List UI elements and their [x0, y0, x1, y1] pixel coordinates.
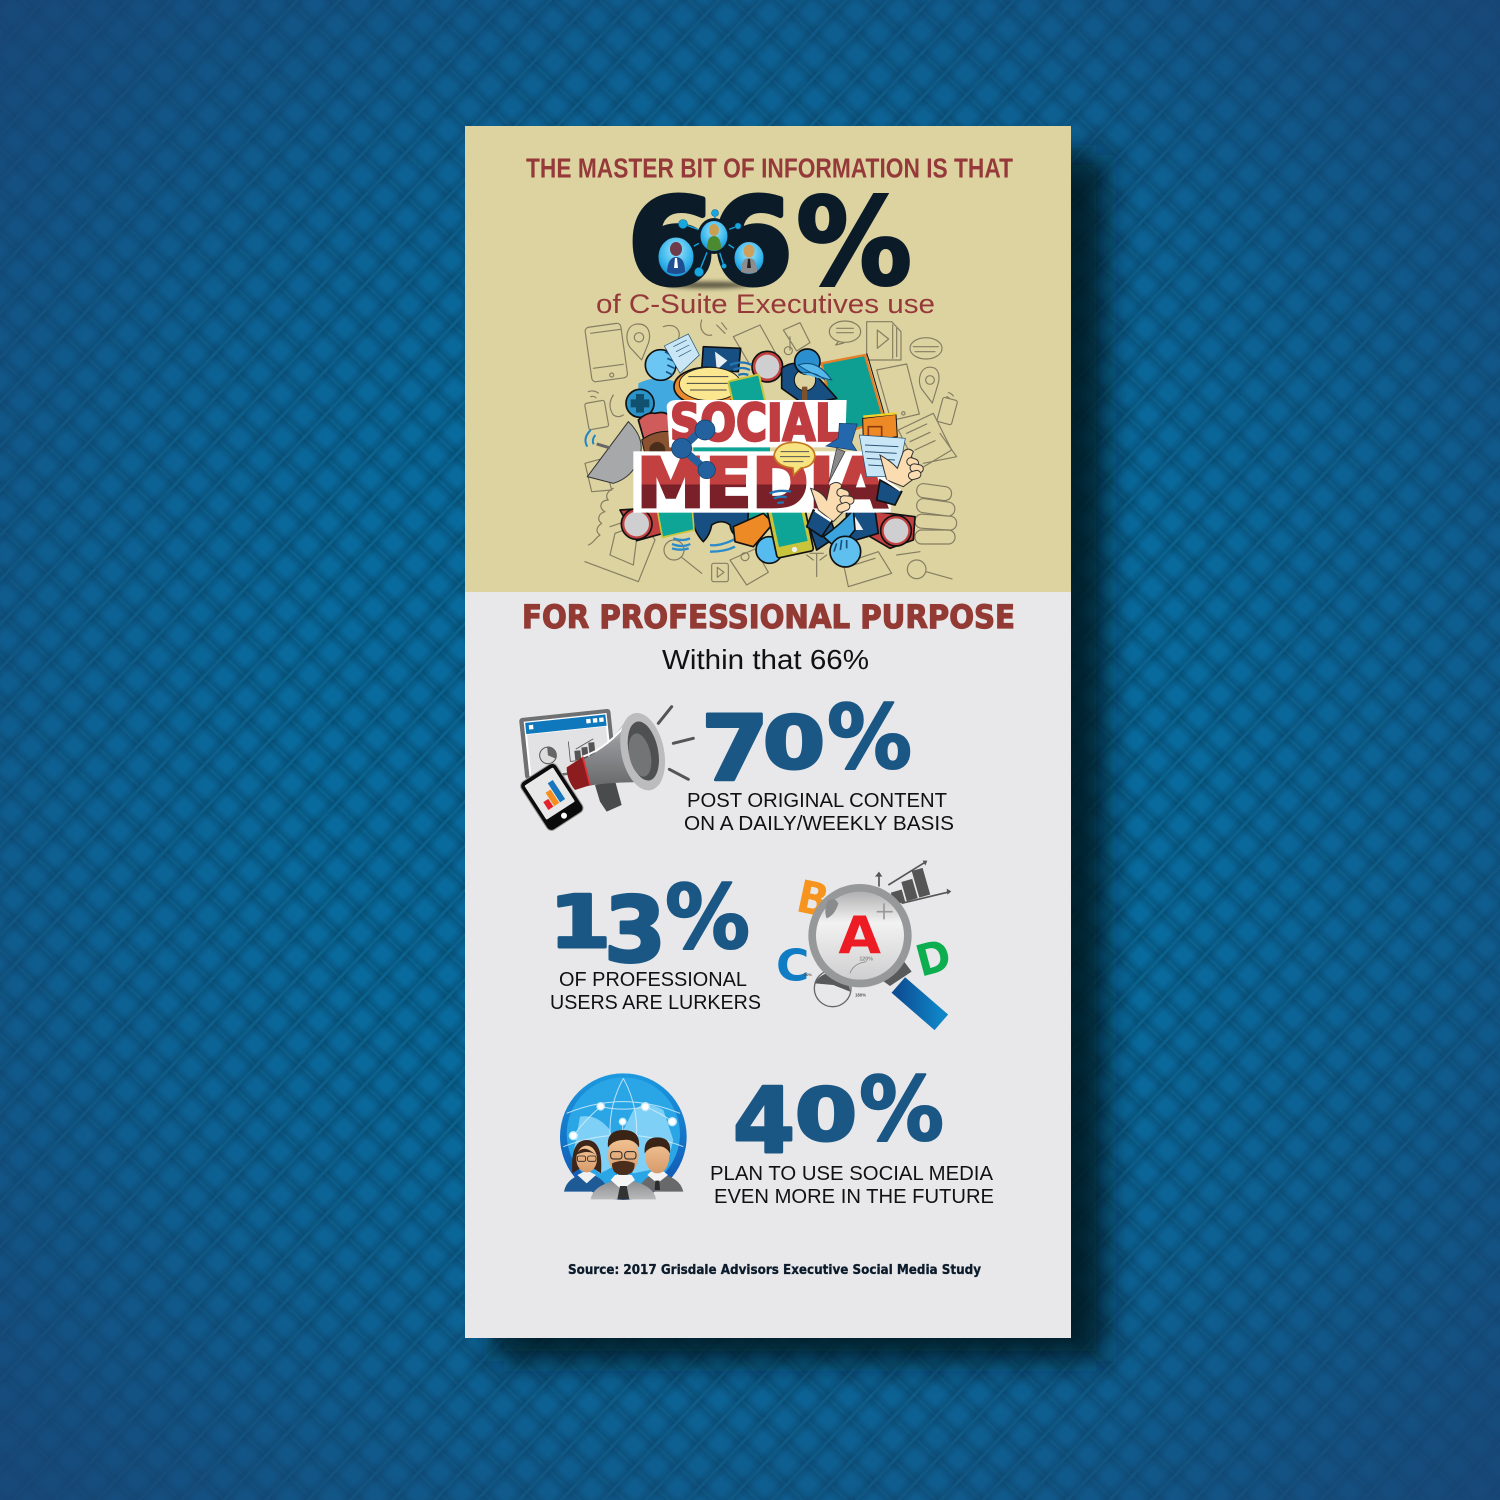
- document: [664, 334, 699, 373]
- panel: tan header: [465, 126, 1071, 592]
- molecule connector: [672, 420, 715, 479]
- value: 0: [795, 1073, 857, 1157]
- speech bubble: [674, 367, 741, 410]
- caption: [710, 1163, 994, 1208]
- caption: [550, 969, 761, 1014]
- icon: magnifier with letters: D: [911, 930, 957, 987]
- icon: globe and people: [560, 1073, 687, 1200]
- value: %: [827, 686, 912, 789]
- caption: OF PROFESSIONAL: [559, 969, 747, 991]
- caption: [684, 790, 954, 835]
- caption: POST ORIGINAL CONTENT: [687, 790, 947, 812]
- stat: 70%: [519, 686, 954, 835]
- heading: professional purpose: FOR PROFESSIONAL PURPOSE: [522, 598, 1015, 636]
- caption: ON A DAILY/WEEKLY BASIS: [684, 813, 954, 835]
- heading: master bit: THE MASTER BIT OF INFORMATION IS THAT: [526, 152, 1013, 184]
- icon: magnifier with letters: C: [776, 942, 809, 992]
- caption: PLAN TO USE SOCIAL MEDIA: [710, 1163, 994, 1185]
- value: 4: [733, 1069, 795, 1174]
- blue head and body: [638, 350, 688, 417]
- satellite dish: [585, 422, 641, 483]
- hand: thumbs up center: [807, 482, 854, 537]
- centre backing colours: [693, 440, 770, 520]
- icon: magnifier with letters: [776, 861, 957, 1022]
- dark blue magnifier body: [782, 363, 837, 405]
- stat: 13%: [549, 861, 957, 1022]
- doodle line art: [585, 320, 958, 587]
- big number 66%: 6: [712, 173, 792, 311]
- value: [549, 866, 750, 983]
- icon: magnifier with letters: A: [838, 906, 881, 966]
- value: 1: [549, 880, 611, 964]
- illustration: social media collage: [585, 320, 958, 587]
- icon: magnifier with letters: 120%: [859, 957, 873, 963]
- icon: megaphone and devices: [519, 707, 693, 832]
- caption: EVEN MORE IN THE FUTURE: [714, 1186, 994, 1208]
- red hoop top: [752, 351, 783, 382]
- subheading: c-suite: of C-Suite Executives use: [596, 289, 935, 319]
- value: 0: [763, 701, 825, 785]
- icon: magnifier with letters: 180%: [855, 993, 866, 998]
- panel: grey body: [465, 592, 1071, 1338]
- hand icon: [795, 349, 832, 380]
- wifi arcs top: [730, 362, 752, 375]
- word: SOCIAL: SOCIAL: [670, 394, 842, 453]
- caption: USERS ARE LURKERS: [550, 992, 761, 1014]
- value: [701, 686, 912, 802]
- value: 3: [604, 878, 666, 983]
- value: %: [665, 866, 750, 969]
- word: MEDIA: MEDIA: [637, 445, 887, 524]
- wifi arcs mid: [769, 491, 791, 503]
- subheading: within that: Within that 66%: [662, 644, 869, 675]
- plus circle: [626, 389, 654, 417]
- stat: 40%: [560, 1058, 994, 1208]
- dark blue video block: [702, 347, 741, 372]
- source note: Source: 2017 Grisdale Advisors Executive Social Media Study: [568, 1263, 981, 1278]
- push pin: [826, 423, 857, 483]
- heart and brown shape: [638, 412, 692, 478]
- bubble over MEDIA: [774, 442, 815, 475]
- small tablet: [728, 374, 768, 419]
- teal tablet: [822, 353, 886, 435]
- value: [733, 1058, 944, 1174]
- note paper: [859, 435, 905, 477]
- big number 66%: %: [796, 174, 912, 313]
- network of people: [657, 210, 765, 278]
- big number 66%: 6: [628, 173, 715, 311]
- big number 66%: [628, 173, 912, 313]
- icon: magnifier with letters: 80%: [804, 972, 812, 977]
- sticky notes orange: [863, 413, 897, 442]
- value: %: [859, 1058, 944, 1161]
- value: 7: [701, 697, 769, 802]
- card shadow: [494, 155, 1106, 1361]
- lower red hoops and blue arches: [620, 507, 915, 552]
- icon: magnifier with letters: B: [792, 870, 833, 928]
- bottom phone and heads: [756, 502, 861, 567]
- hand: thumbs up right: [877, 449, 924, 505]
